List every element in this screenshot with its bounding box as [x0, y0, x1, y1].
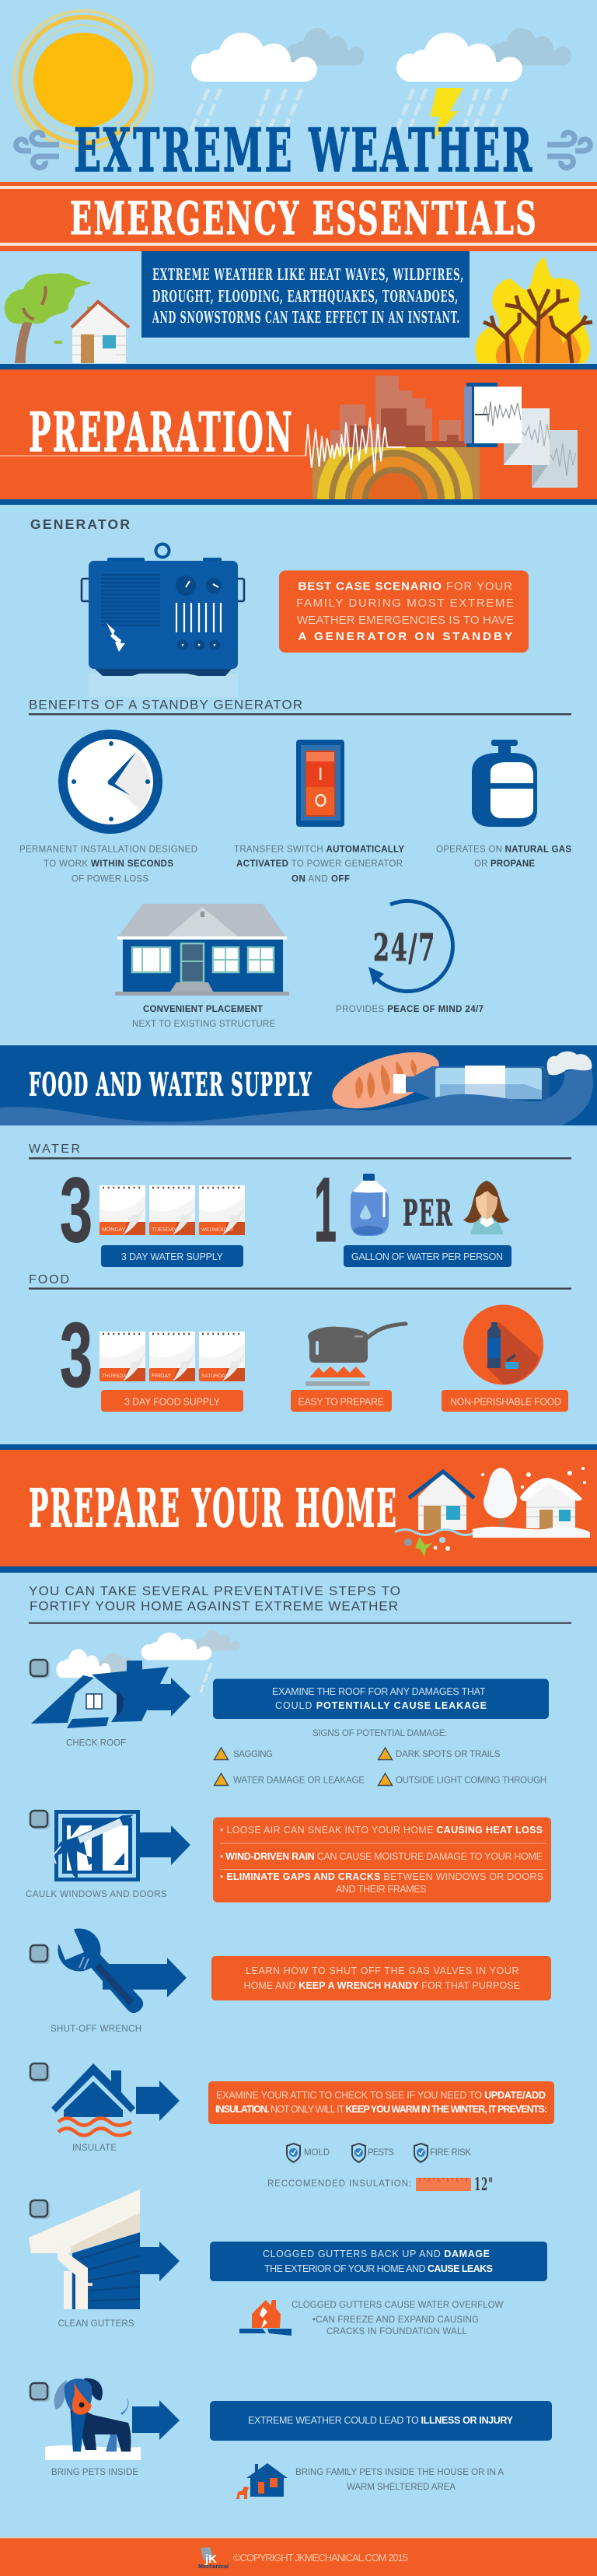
label: easy to prepare	[291, 1390, 392, 1412]
icon: snow covered tree and house	[473, 1467, 590, 1538]
icon: water bottle	[393, 1066, 550, 1100]
icon: sun	[14, 11, 152, 149]
icon: house	[72, 302, 129, 363]
text: water overflow: CLOGGED GUTTERS CAUSE WATER OVERFLOW	[292, 2301, 504, 2310]
icon: pet and house	[236, 2463, 288, 2499]
calendar: monday	[100, 1185, 145, 1235]
caption: transfer switch: ON AND OFF	[292, 874, 350, 884]
label: non-perishable food: NON-PERISHABLE FOOD	[450, 1397, 561, 1408]
panel: preparation banner	[0, 364, 597, 505]
icon: flooded house	[395, 1472, 476, 1557]
callout: gas valves	[211, 1956, 551, 2000]
callout: clogged gutters	[210, 2242, 547, 2281]
icon: burning trees	[475, 257, 592, 363]
calendar: tuesday	[149, 1185, 195, 1235]
callout: clogged gutters: THE EXTERIOR OF YOUR HOME AND CAUSE LEAKS	[264, 2263, 493, 2274]
caption: permanent installation: OF POWER LOSS	[72, 874, 148, 884]
logo: Mechanical	[198, 2563, 229, 2570]
icon: transfer switch	[296, 740, 344, 827]
icon: city skyline	[330, 376, 465, 447]
callout: caulk facts: AND THEIR FRAMES	[336, 1884, 426, 1895]
item: mold: MOLD	[304, 2148, 330, 2158]
intro: preventative steps: FORTIFY YOUR HOME AGAINST EXTREME WEATHER	[30, 1599, 398, 1613]
warning: sagging	[215, 1748, 273, 1759]
icon: 24/7 cycle: 24/7	[373, 926, 436, 970]
icon: bread	[325, 1041, 446, 1120]
caption: natural gas: OPERATES ON NATURAL GAS	[436, 845, 571, 854]
item: fire risk: FIRE RISK	[430, 2148, 471, 2158]
item: fire risk	[414, 2144, 471, 2162]
caption: insulate: INSULATE	[72, 2144, 117, 2153]
callout: caulk facts: • WIND-DRIVEN RAIN CAN CAUSE MOISTURE DAMAGE TO YOUR HOME	[220, 1851, 543, 1862]
arrow	[103, 1958, 187, 1997]
callout: attic insulation	[208, 2081, 554, 2124]
callout: gas valves: HOME AND KEEP A WRENCH HANDY FOR THAT PURPOSE	[244, 1980, 520, 1991]
arrow	[132, 2400, 180, 2440]
text: bring family pets: WARM SHELTERED AREA	[347, 2483, 456, 2492]
warning: water damage: WATER DAMAGE OR LEAKAGE	[233, 1776, 365, 1786]
panel: generator	[19, 516, 571, 1029]
text: bring family pets: BRING FAMILY PETS INSIDE THE HOUSE OR IN A	[295, 2468, 504, 2477]
icon: insulated house	[51, 2063, 135, 2136]
caption: transfer switch	[234, 845, 404, 884]
panel: prepare your home banner	[0, 1444, 597, 1573]
heading: water: WATER	[29, 1143, 80, 1156]
caption: clean gutters: CLEAN GUTTERS	[58, 2319, 134, 2329]
divider	[29, 1157, 571, 1159]
icon: checkbox	[30, 1660, 50, 1678]
step: insulate	[30, 2063, 554, 2195]
calendar: monday: MONDAY	[102, 1227, 126, 1233]
icon: wind right	[547, 132, 590, 168]
logo	[198, 2547, 229, 2570]
caption: wrench: SHUT-OFF WRENCH	[51, 2025, 141, 2034]
icon: checkbox	[30, 1811, 50, 1829]
icon: checkbox	[30, 2383, 50, 2402]
callout: best case scenario: A GENERATOR ON STANDBY	[298, 630, 512, 643]
caption: transfer switch: TRANSFER SWITCH AUTOMATICALLY	[234, 845, 404, 854]
calendar: saturday: SATURDAY	[201, 1374, 229, 1379]
icon: rain cloud	[191, 28, 364, 131]
icon: seismograph sheets	[464, 383, 578, 488]
arrow	[138, 1825, 190, 1865]
heading: food: FOOD	[29, 1273, 69, 1286]
icon: window with caulk gun	[53, 1810, 140, 1881]
panel: header	[0, 11, 597, 363]
calendar: saturday	[199, 1332, 245, 1381]
icon: woman	[463, 1181, 510, 1234]
label: 3 day water supply: 3 DAY WATER SUPPLY	[121, 1251, 224, 1262]
icon: cracked foundation	[239, 2300, 292, 2336]
icon: gutter	[29, 2189, 140, 2309]
step: caulk windows	[26, 1810, 551, 1902]
panel: food	[29, 1273, 571, 1412]
label: non-perishable food	[442, 1390, 568, 1412]
logo: jK	[204, 2553, 217, 2566]
divider	[29, 713, 571, 716]
copyright: ©COPYRIGHT JKMECHANICAL.COM 2015	[233, 2552, 408, 2564]
chart: seismic wave	[305, 418, 406, 473]
caption: permanent installation	[19, 845, 197, 884]
caption: convenient placement: CONVENIENT PLACEMENT	[143, 1005, 263, 1014]
icon: propane tank	[472, 740, 537, 827]
intro text box	[141, 251, 470, 338]
caption: transfer switch: ACTIVATED TO POWER GENERATOR	[236, 859, 403, 869]
arrow	[140, 2242, 180, 2281]
icon: roof	[31, 1661, 169, 1728]
step: bring pets inside	[30, 2378, 552, 2499]
callout: caulk facts	[213, 1817, 551, 1902]
callout: caulk facts: • LOOSE AIR CAN SNEAK INTO YOUR HOME CAUSING HEAT LOSS	[220, 1825, 543, 1836]
callout: examine the roof: COULD POTENTIALLY CAUSE LEAKAGE	[275, 1700, 487, 1711]
stat: 3 days food: 3	[60, 1304, 93, 1406]
callout: attic insulation: INSULATION. NOT ONLY WILL IT KEEP YOU WARM IN THE WINTER, IT PREVENTS:	[215, 2104, 547, 2115]
text: per: PER	[403, 1192, 453, 1234]
callout: illness or injury	[210, 2401, 552, 2441]
footer	[0, 2537, 597, 2576]
caption: natural gas: OR PROPANE	[474, 859, 535, 869]
panel: water	[29, 1143, 571, 1267]
heading: preparation: PREPARATION	[29, 401, 294, 464]
text: water overflow: CRACKS IN FOUNDATION WALL	[326, 2327, 468, 2336]
icon: clouds	[56, 1630, 240, 1692]
callout: best case scenario: FAMILY DURING MOST EXTREME	[296, 597, 514, 610]
warning: dark spots: DARK SPOTS OR TRAILS	[396, 1750, 501, 1759]
step: check roof	[30, 1630, 549, 1786]
caption: check roof: CHECK ROOF	[66, 1739, 126, 1748]
icon: non-perishable food	[463, 1305, 543, 1384]
caption: convenient placement	[132, 1005, 275, 1029]
item: pests: PESTS	[368, 2148, 394, 2158]
callout: caulk facts: • ELIMINATE GAPS AND CRACKS BETWEEN WINDOWS OR DOORS	[220, 1871, 543, 1882]
warning: sagging: SAGGING	[233, 1750, 273, 1759]
label: gallon per person: GALLON OF WATER PER PERSON	[351, 1251, 503, 1262]
warning: outside light: OUTSIDE LIGHT COMING THROUGH	[396, 1776, 546, 1786]
icon: pot on burner	[305, 1324, 406, 1386]
label: gallon per person	[344, 1245, 511, 1267]
text: signs of damage: SIGNS OF POTENTIAL DAMAGE:	[312, 1729, 448, 1738]
icon: windblown tree	[5, 273, 101, 363]
text: water overflow: •CAN FREEZE AND EXPAND CAUSING	[312, 2315, 479, 2325]
panel: food and water banner	[0, 1041, 597, 1125]
icon: 24/7 cycle	[368, 901, 452, 991]
calendar: friday	[149, 1332, 195, 1381]
callout: best case scenario: WEATHER EMERGENCIES IS TO HAVE	[297, 614, 514, 627]
calendar: wednesday	[199, 1185, 245, 1235]
icon: earth layers	[312, 447, 480, 499]
calendar: wednesday: WEDNESDAY	[201, 1227, 234, 1233]
label: 3 day water supply	[101, 1245, 243, 1267]
step: shut-off wrench	[30, 1924, 551, 2034]
calendar: friday: FRIDAY	[152, 1374, 171, 1379]
icon: checkbox	[30, 1945, 50, 1964]
caption: peace of mind: PROVIDES PEACE OF MIND 24/7	[336, 1005, 484, 1014]
calendar: thursday: THURSDAY	[102, 1374, 130, 1379]
divider line	[0, 456, 306, 457]
icon: checkbox	[30, 2200, 50, 2219]
icon: ruler	[416, 2178, 471, 2191]
item: mold	[287, 2144, 330, 2162]
label: 3 day food supply: 3 DAY FOOD SUPPLY	[124, 1397, 221, 1408]
divider	[29, 1288, 571, 1290]
arrow	[148, 1678, 190, 1717]
heading: generator: GENERATOR	[30, 516, 130, 532]
panel: water: 1	[314, 1159, 337, 1262]
caption: bring pets inside: BRING PETS INSIDE	[51, 2468, 138, 2477]
caption: caulk windows: CAULK WINDOWS AND DOORS	[26, 1890, 167, 1899]
arrow	[136, 2081, 180, 2121]
icon: water jug	[351, 1174, 389, 1236]
item: pests	[352, 2144, 394, 2162]
stat: 3 days water: 3	[60, 1159, 93, 1262]
banner: emergency essentials	[0, 182, 597, 251]
heading: benefits: BENEFITS OF A STANDBY GENERATOR	[29, 697, 302, 712]
text: recommended insulation: RECCOMENDED INSULATION:	[267, 2179, 411, 2189]
icon: wrench	[54, 1924, 143, 2013]
caption: permanent installation: TO WORK WITHIN SECONDS	[44, 859, 173, 869]
step: clean gutters	[29, 2189, 547, 2336]
icon: wind left	[16, 132, 59, 168]
warning: outside light	[378, 1773, 546, 1786]
callout: examine the roof	[213, 1678, 549, 1719]
icon: house placement	[115, 904, 289, 996]
callout: illness or injury: EXTREME WEATHER COULD LEAD TO ILLNESS OR INJURY	[248, 2415, 514, 2426]
callout: best case scenario	[279, 571, 529, 653]
icon: clock	[58, 730, 162, 834]
callout: examine the roof: EXAMINE THE ROOF FOR ANY DAMAGES THAT	[272, 1686, 486, 1697]
wave	[0, 1067, 593, 1125]
callout: best case scenario: BEST CASE SCENARIO FOR YOUR	[298, 580, 512, 593]
caption: convenient placement: NEXT TO EXISTING STRUCTURE	[132, 1020, 275, 1029]
caption: natural gas	[436, 845, 571, 869]
icon: dog in snow	[45, 2378, 141, 2460]
icon: checkbox	[30, 2063, 50, 2082]
callout: attic insulation: EXAMINE YOUR ATTIC TO CHECK TO SEE IF YOU NEED TO UPDATE/ADD	[216, 2090, 546, 2101]
calendar: tuesday: TUESDAY	[152, 1227, 177, 1233]
heading: food and water: FOOD AND WATER SUPPLY	[29, 1066, 312, 1103]
intro: preventative steps	[29, 1584, 571, 1624]
text: water overflow	[292, 2301, 504, 2336]
icon: generator	[82, 544, 244, 697]
warning: water damage	[215, 1773, 365, 1786]
text: bring family pets	[295, 2468, 504, 2492]
label: 3 day food supply	[101, 1390, 243, 1412]
icon: wave foam	[547, 1052, 592, 1075]
caption: permanent installation: PERMANENT INSTALLATION DESIGNED	[19, 845, 197, 854]
callout: gas valves: LEARN HOW TO SHUT OFF THE GAS VALVES IN YOUR	[246, 1965, 519, 1976]
intro: preventative steps: YOU CAN TAKE SEVERAL PREVENTATIVE STEPS TO	[29, 1584, 400, 1598]
icon: storm cloud with lightning	[396, 28, 571, 141]
label: easy to prepare: EASY TO PREPARE	[298, 1397, 384, 1408]
text: 12 inches: 12"	[474, 2175, 494, 2195]
warning: dark spots	[378, 1748, 501, 1759]
callout: clogged gutters: CLOGGED GUTTERS BACK UP AND DAMAGE	[263, 2249, 490, 2259]
calendar: thursday	[100, 1332, 145, 1381]
